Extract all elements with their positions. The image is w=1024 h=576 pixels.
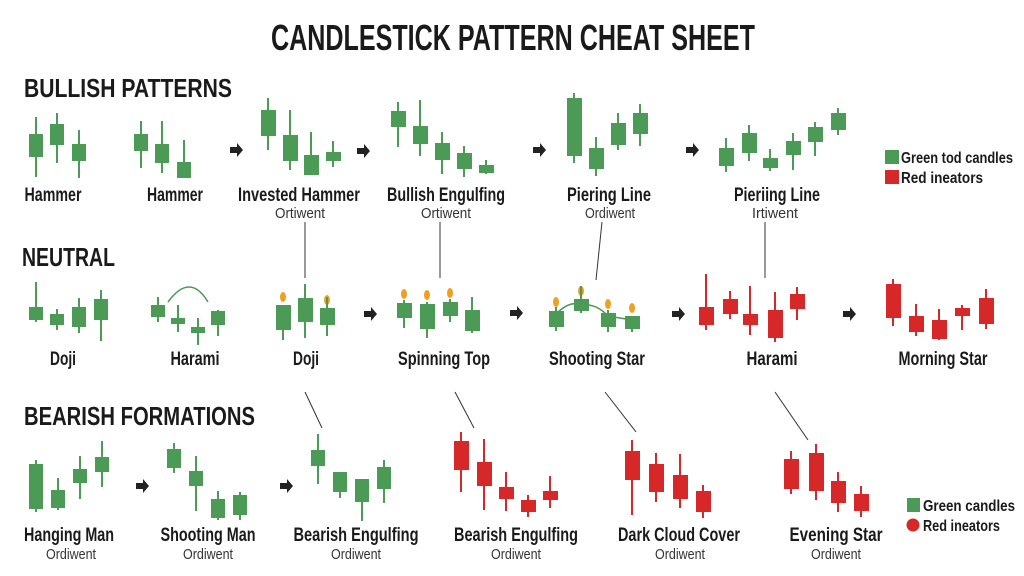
arrow bbox=[357, 144, 370, 158]
arrow bbox=[230, 143, 243, 157]
row 1: pieriing line candles bbox=[719, 108, 846, 172]
legend bottom: Red ineators bbox=[923, 518, 1000, 535]
row 2 labels bbox=[50, 349, 988, 370]
row 1 labels: Piering Line bbox=[567, 185, 651, 206]
row 3: shooting man candles bbox=[167, 443, 247, 520]
row 1: piering line candles bbox=[567, 93, 648, 176]
row 2 labels: Harami bbox=[746, 349, 798, 370]
connector lines bbox=[305, 222, 808, 440]
row 2: doji candles bbox=[29, 282, 108, 341]
row 3 labels: Shooting Man bbox=[160, 525, 256, 546]
row 2: morning star candles bbox=[886, 279, 994, 340]
row 2 labels: Morning Star bbox=[898, 349, 988, 370]
arrow bbox=[510, 306, 523, 320]
row 3 labels: Evening Star bbox=[790, 525, 883, 546]
row 3 labels: Ordiwent bbox=[811, 546, 862, 563]
row 2: doji 2 candles bbox=[276, 284, 335, 340]
row 3 labels: Ordiwent bbox=[46, 546, 97, 563]
row 1: invested hammer candles bbox=[261, 98, 341, 175]
row 1 labels: Ordiwent bbox=[585, 205, 636, 222]
row 3: evening star candles bbox=[784, 444, 869, 517]
row 2 labels: Doji bbox=[293, 349, 319, 370]
row 3 labels: Ordiwent bbox=[331, 546, 382, 563]
row 3 labels bbox=[24, 525, 883, 563]
row 3 labels: Bearish Engulfing bbox=[294, 525, 418, 546]
arrow bbox=[672, 307, 685, 321]
arrow bbox=[280, 479, 293, 493]
legend top bbox=[885, 150, 1013, 187]
row 1: hammer candles bbox=[29, 113, 86, 178]
arrow bbox=[843, 307, 856, 321]
legend top: Red ineators bbox=[901, 170, 983, 187]
row 1: hammer 2 candles bbox=[134, 121, 191, 178]
row 2 labels: Spinning Top bbox=[398, 349, 490, 370]
arrow bbox=[533, 143, 546, 157]
row 1 labels: Hammer bbox=[24, 185, 82, 206]
row 3: bearish engulfing green candles bbox=[311, 434, 391, 521]
row 1 labels: Ortiwent bbox=[275, 205, 326, 222]
row 2: harami red candles bbox=[699, 274, 805, 342]
arrow bbox=[364, 307, 377, 321]
row 3 labels: Ordiwent bbox=[491, 546, 542, 563]
row 3 labels: Bearish Engulfing bbox=[454, 525, 578, 546]
row 1 labels: Irtiwent bbox=[752, 205, 799, 222]
heading: bullish patterns: BULLISH PATTERNS bbox=[24, 73, 232, 103]
row 1 labels: Hammer bbox=[147, 185, 203, 206]
title: CANDLESTICK PATTERN CHEAT SHEET bbox=[271, 17, 755, 58]
row 3 labels: Hanging Man bbox=[24, 525, 114, 546]
row 3 labels: Dark Cloud Cover bbox=[618, 525, 740, 546]
row 3: dark cloud cover candles bbox=[625, 440, 711, 518]
row 1: bullish engulfing candles bbox=[391, 100, 494, 177]
row 1 labels: Ortiwent bbox=[421, 205, 472, 222]
row 1 labels: Invested Hammer bbox=[238, 185, 360, 206]
row 2 labels: Harami bbox=[170, 349, 220, 370]
arrow bbox=[136, 479, 149, 493]
arrow bbox=[686, 143, 699, 157]
row 2: spinning top candles bbox=[397, 288, 480, 338]
row 1 labels: Bullish Engulfing bbox=[387, 185, 505, 206]
row 2: harami candles bbox=[151, 287, 225, 345]
row 2: shooting star candles bbox=[549, 286, 640, 332]
row 2 labels: Shooting Star bbox=[549, 349, 645, 370]
row 3 labels: Ordiwent bbox=[183, 546, 234, 563]
row 1 labels bbox=[24, 185, 820, 222]
legend bottom bbox=[906, 498, 1015, 535]
row 3: bearish engulfing red candles bbox=[454, 432, 558, 517]
heading: bearish formations: BEARISH FORMATIONS bbox=[24, 401, 255, 431]
row 3: hanging man candles bbox=[29, 441, 109, 512]
heading: neutral: NEUTRAL bbox=[22, 242, 115, 272]
row 2 labels: Doji bbox=[50, 349, 76, 370]
row 1 labels: Pieriing Line bbox=[734, 185, 820, 206]
row 3 labels: Ordiwent bbox=[655, 546, 706, 563]
